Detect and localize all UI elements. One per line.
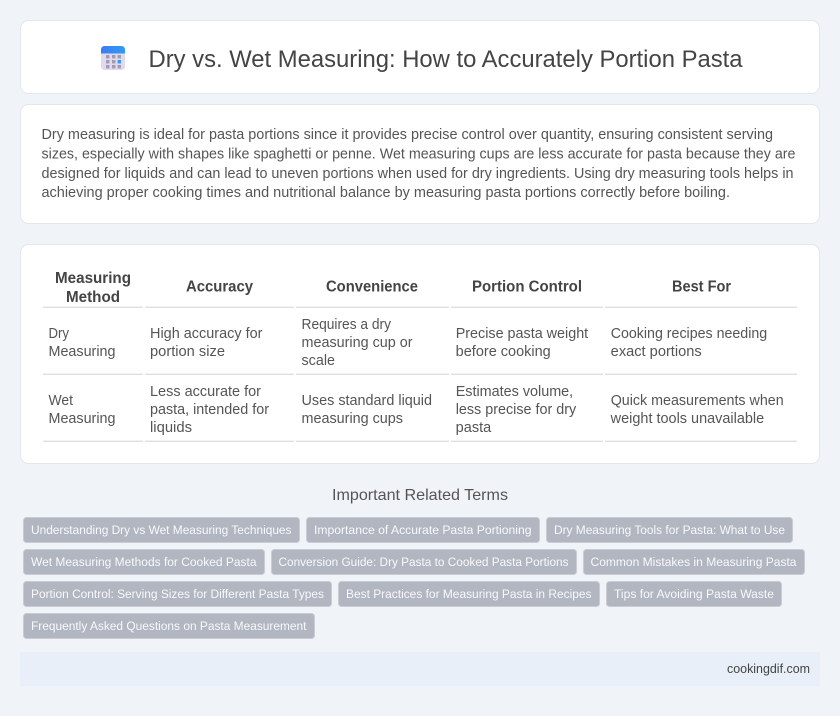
table row: wet measuring: Wet bbox=[48, 393, 73, 409]
table row: dry measuring: High accuracy for bbox=[150, 326, 263, 342]
related terms tags: Common Mistakes in Measuring Pasta bbox=[590, 555, 797, 569]
table row: wet measuring: Estimates volume, bbox=[456, 384, 573, 400]
related terms tags: Best Practices for Measuring Pasta in Recipes bbox=[346, 587, 592, 601]
text block: introduction paragraph: achieving proper cooking times and nutritional balance by measuring pasta portions correctly before boiling. bbox=[42, 185, 730, 201]
panel: comparison table bbox=[20, 244, 820, 464]
table header row: Portion Control bbox=[472, 278, 582, 296]
table row: dry measuring: Cooking recipes needing bbox=[611, 326, 767, 342]
table row: dry measuring: measuring cup or bbox=[302, 335, 413, 351]
related terms tags: Frequently Asked Questions on Pasta Measurement bbox=[31, 619, 307, 633]
table row: dry measuring: Requires a dry bbox=[302, 317, 392, 333]
table row: dry measuring: portion size bbox=[150, 344, 225, 360]
panel: header bbox=[20, 20, 820, 94]
related terms tags: Importance of Accurate Pasta Portioning bbox=[314, 523, 532, 537]
icon: calendar bbox=[101, 46, 125, 70]
related terms tags: Dry Measuring Tools for Pasta: What to Use bbox=[554, 523, 785, 537]
table row: dry measuring: scale bbox=[302, 353, 335, 369]
table row: dry measuring: Measuring bbox=[48, 344, 116, 360]
footer: cookingdif.com bbox=[727, 662, 810, 676]
text block: introduction paragraph: designed for liquids and can lead to uneven portions when used for dry ingredients. Using dry measuring tools helps in bbox=[42, 166, 794, 182]
table row: dry measuring: exact portions bbox=[611, 344, 702, 360]
table row: wet measuring: pasta bbox=[456, 420, 491, 436]
table row: wet measuring: weight tools unavailable bbox=[610, 411, 764, 427]
table row: wet measuring bbox=[48, 384, 784, 436]
table row: wet measuring: less precise for dry bbox=[456, 402, 577, 418]
table row: dry measuring: Precise pasta weight bbox=[456, 326, 588, 342]
title: Dry vs. Wet Measuring: How to Accurately Portion Pasta bbox=[148, 46, 743, 73]
table header row: Best For bbox=[672, 278, 731, 296]
related terms tags: Conversion Guide: Dry Pasta to Cooked Pasta Portions bbox=[278, 555, 568, 569]
text block: introduction paragraph: Dry measuring is ideal for pasta portions since it provides precise control over quantity, ensuring consistent serving bbox=[42, 127, 773, 143]
table row: dry measuring bbox=[48, 317, 767, 369]
related terms tags: Wet Measuring Methods for Cooked Pasta bbox=[31, 555, 257, 569]
text block: introduction paragraph: sizes, especially with shapes like spaghetti or penne. Wet measuring cups are less accurate for pasta because they are bbox=[42, 146, 796, 162]
text block: introduction paragraph bbox=[42, 127, 796, 201]
table row: wet measuring: liquids bbox=[150, 420, 192, 436]
table row: wet measuring: pasta, intended for bbox=[150, 402, 269, 418]
table header row: Measuring bbox=[55, 270, 131, 287]
related terms tags: Portion Control: Serving Sizes for Different Pasta Types bbox=[31, 587, 324, 601]
table row: dry measuring: before cooking bbox=[456, 344, 551, 360]
table header row: Accuracy bbox=[186, 278, 253, 296]
table row: wet measuring: Less accurate for bbox=[150, 384, 261, 400]
table header row bbox=[55, 270, 731, 306]
related terms tags: Tips for Avoiding Pasta Waste bbox=[614, 587, 774, 601]
footer bbox=[20, 652, 820, 686]
panel: introduction bbox=[20, 104, 820, 224]
table header row: Convenience bbox=[326, 278, 418, 296]
table header row: Method bbox=[66, 289, 120, 306]
table row: wet measuring: measuring cups bbox=[302, 411, 403, 427]
table row: wet measuring: Measuring bbox=[48, 411, 116, 427]
heading: important related terms: Important Related Terms bbox=[332, 487, 508, 504]
table row: dry measuring: Dry bbox=[48, 326, 70, 342]
table row: wet measuring: Quick measurements when bbox=[611, 393, 784, 409]
table row: wet measuring: Uses standard liquid bbox=[302, 393, 432, 409]
related terms tags: Understanding Dry vs Wet Measuring Techniques bbox=[31, 523, 292, 537]
related terms tags bbox=[24, 518, 804, 638]
